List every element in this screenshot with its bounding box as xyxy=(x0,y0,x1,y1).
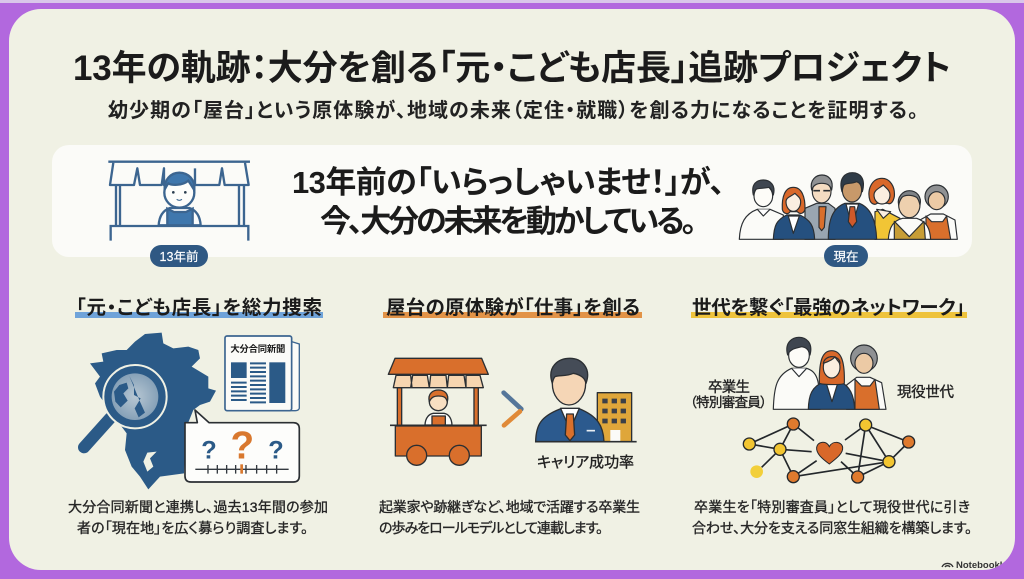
label: graduates: 卒業生 xyxy=(708,379,750,396)
description: network: 卒業生を「特別審査員」として現役世代に引き xyxy=(694,499,970,515)
magnifying glass xyxy=(84,365,167,447)
description: search: 大分合同新聞と連携し、過去13年間の参加 xyxy=(68,499,328,515)
panel: network column xyxy=(690,297,972,536)
icon: group of present-day people xyxy=(739,173,957,239)
speech bubble with question marks: ? xyxy=(231,424,254,467)
newspaper: 大分合同新聞 xyxy=(230,343,285,354)
person: woman in yellow top xyxy=(869,178,900,239)
arrow: chevron xyxy=(504,393,521,425)
map of Kyushu xyxy=(90,333,216,489)
person: man with glasses xyxy=(805,175,835,239)
speech bubble with question marks: ? xyxy=(268,436,284,464)
hero message xyxy=(292,165,725,239)
speech bubble with question marks: ? xyxy=(201,436,217,464)
child vendor xyxy=(425,390,452,425)
description: search: 者の「現在地」を広く募らり調査します。 xyxy=(77,520,308,536)
label: current generation: 現役世代 xyxy=(897,384,954,401)
person: woman in navy blazer xyxy=(773,187,815,239)
title: 13年の軌跡：大分を創る「元・こども店長」追跡プロジェクト xyxy=(73,49,951,88)
badge: 13 years ago xyxy=(150,245,208,267)
illustration: food cart xyxy=(388,358,488,465)
heading: career: 屋台の原体験が「仕事」を創る xyxy=(386,296,640,319)
description: career xyxy=(379,499,640,536)
newspaper xyxy=(225,336,299,411)
description: network: 合わせ、大分を支える同窓生組織を構築します。 xyxy=(692,520,972,536)
badge: present: 現在 xyxy=(833,250,859,264)
icon: child at food stall 13 years ago xyxy=(108,162,250,241)
person: man in navy suit with orange tie xyxy=(828,173,877,239)
icon: three generations xyxy=(773,337,886,409)
hero message: 13年前の「いらっしゃいませ！」が、 xyxy=(292,165,725,200)
badge: 13 years ago: 13年前 xyxy=(160,249,198,264)
logo: NotebookLM watermark: NotebookLM xyxy=(956,560,1014,571)
label: graduates: （特別審査員） xyxy=(690,395,767,410)
panel: hero banner xyxy=(52,145,972,267)
hero message: 今、大分の未来を動かしている。 xyxy=(320,204,697,239)
logo: NotebookLM watermark xyxy=(941,562,1002,568)
description: network xyxy=(692,499,972,536)
label: career success rate: キャリア成功率 xyxy=(537,454,634,471)
heading: network: 世代を繋ぐ「最強のネットワーク」 xyxy=(692,297,965,319)
description: career: 起業家や跡継ぎなど、地域で活躍する卒業生 xyxy=(379,499,640,515)
description: search xyxy=(68,499,328,536)
illustration: businessperson and building xyxy=(535,358,637,442)
panel: search column xyxy=(68,297,328,536)
network diagram xyxy=(743,418,915,483)
panel: career column xyxy=(379,296,642,536)
description: career: の歩みをロールモデルとして連載します。 xyxy=(379,520,603,536)
person: older man in vest xyxy=(888,191,931,239)
illustration: map, newspaper and question bubble xyxy=(84,333,299,489)
person: man in white shirt xyxy=(739,180,783,239)
label: graduates xyxy=(690,379,767,410)
speech bubble with question marks xyxy=(185,410,299,482)
badge: present xyxy=(824,245,868,267)
heading: search: 「元・こども店長」を総力捜索 xyxy=(76,297,322,319)
subtitle: 幼少期の「屋台」という原体験が、地域の未来（定住・就職）を創る力になることを証明する。 xyxy=(108,98,918,122)
person: older woman in apron xyxy=(920,185,957,239)
